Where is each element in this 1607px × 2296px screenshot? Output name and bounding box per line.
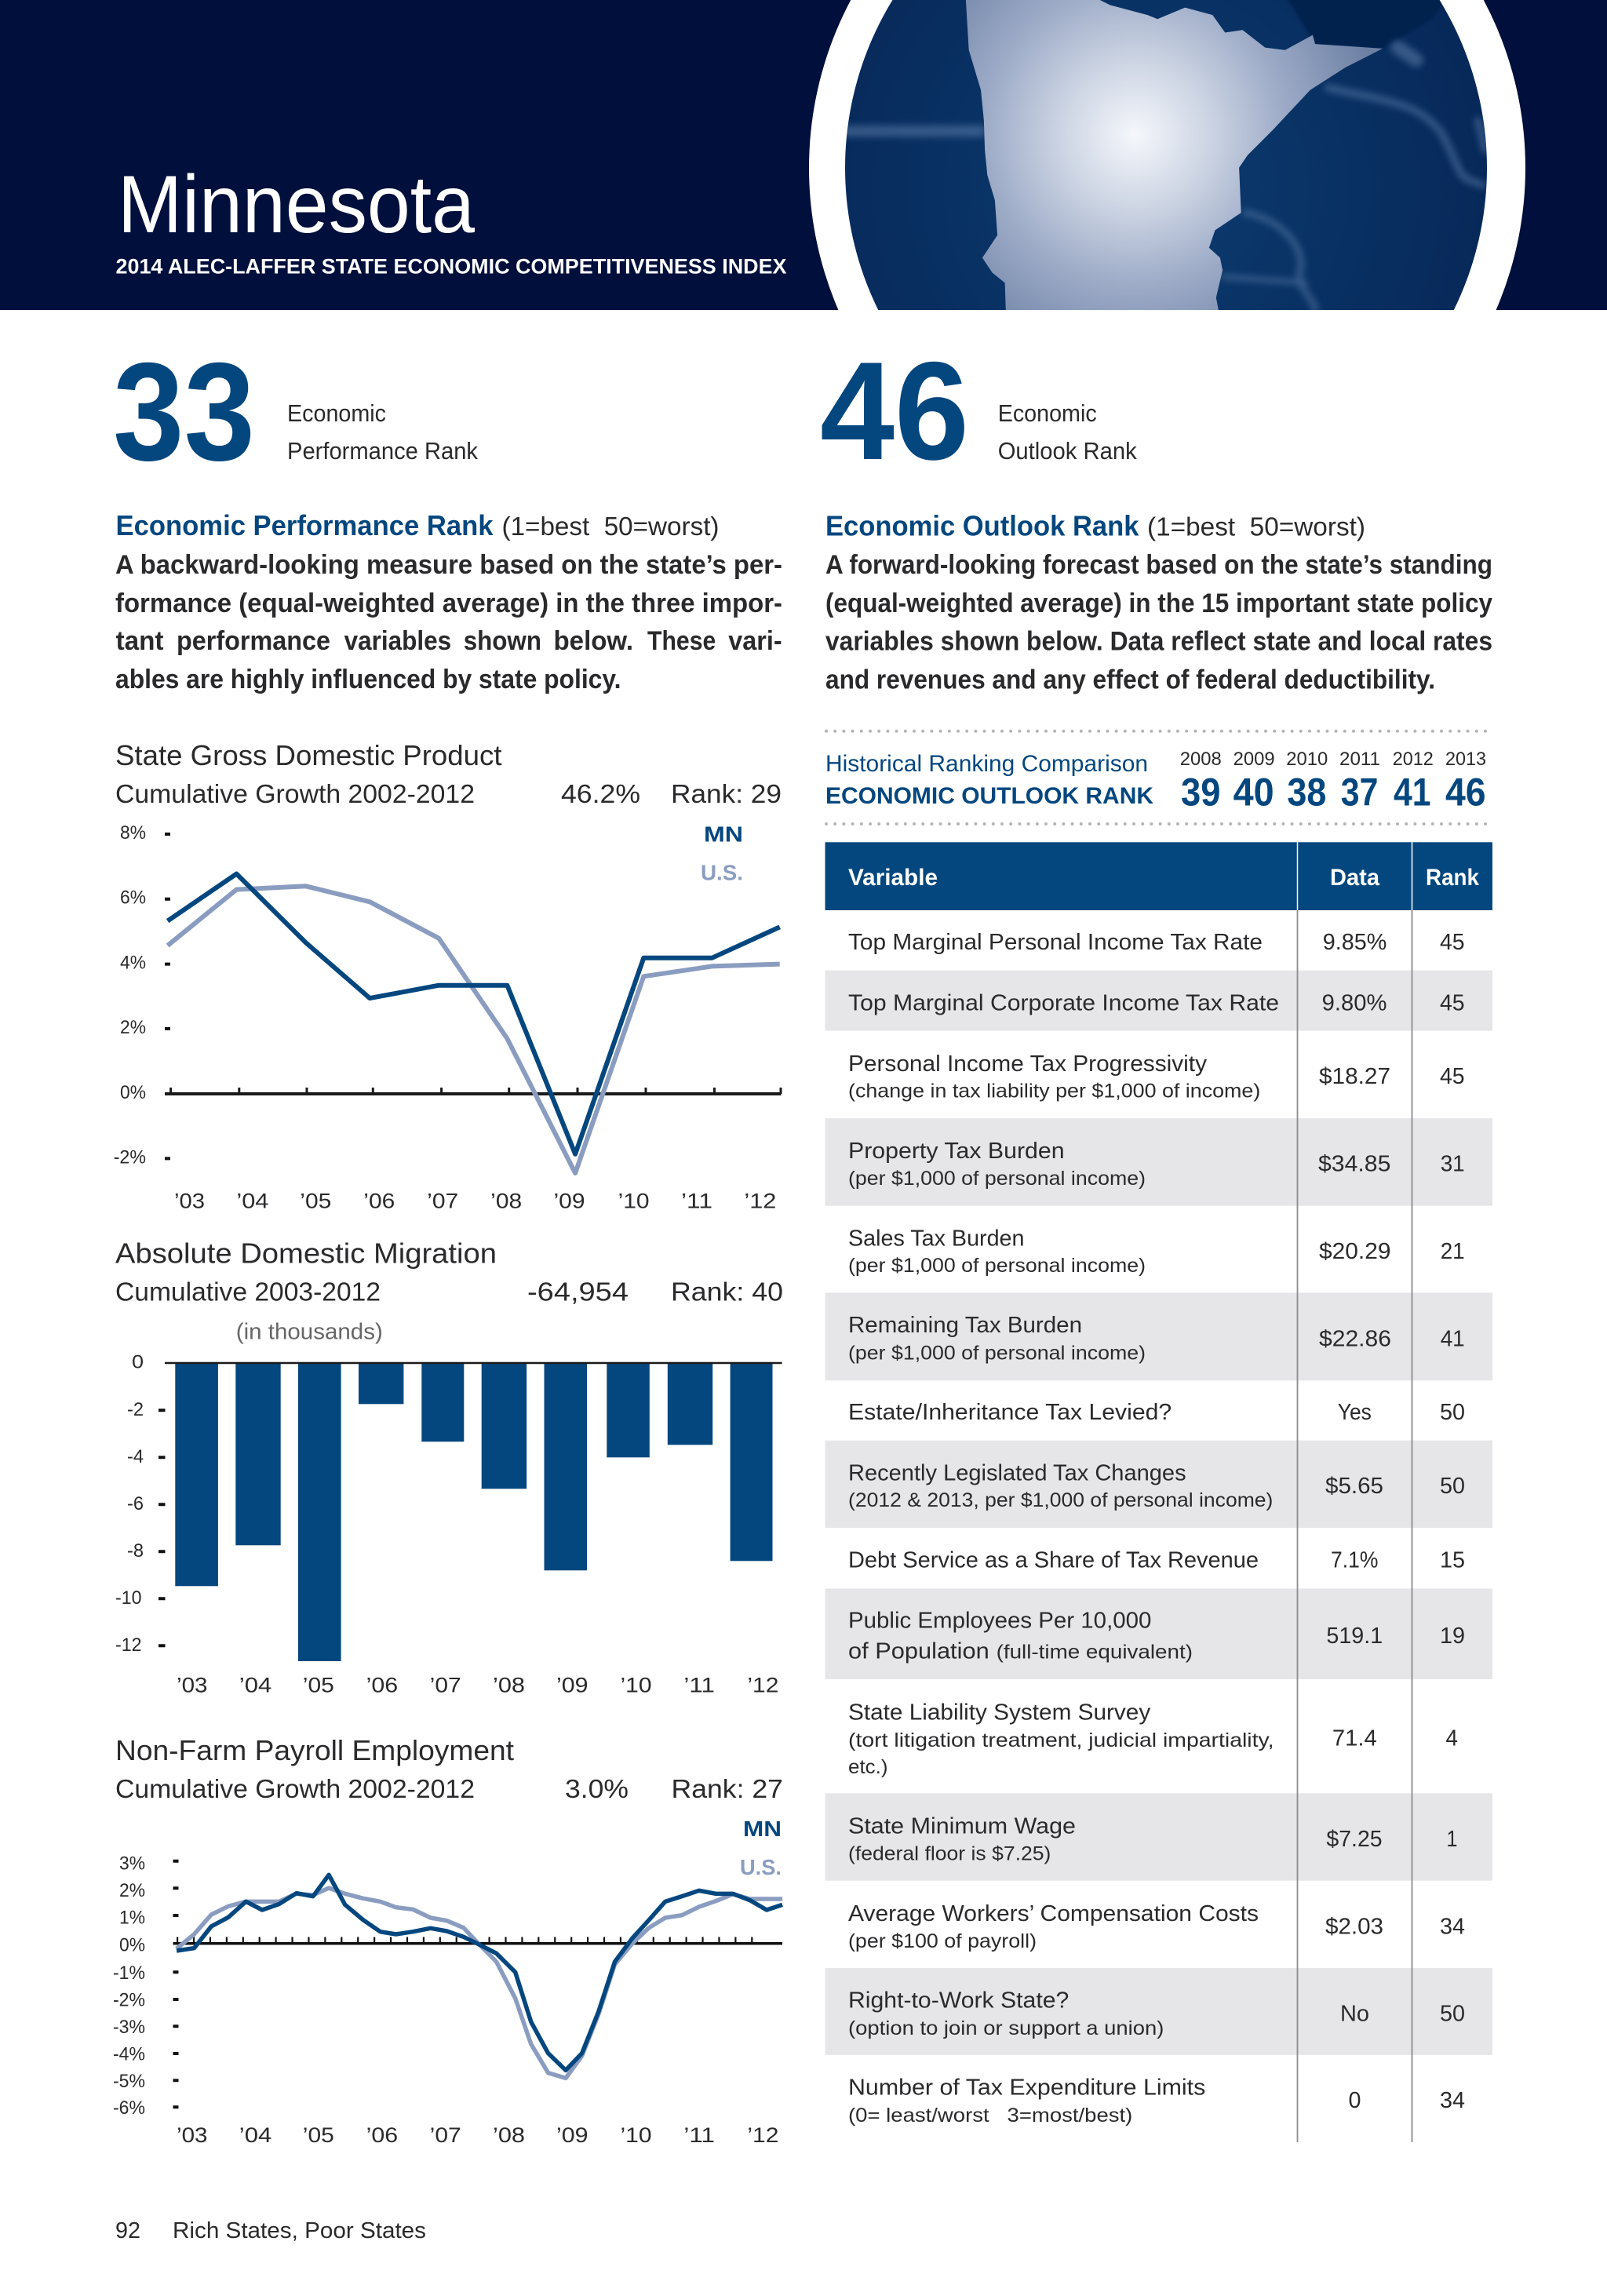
row: debt service xyxy=(848,1548,1465,1573)
comparison ranks: 39 xyxy=(1181,771,1221,815)
line chart: GDP growth: ’11 xyxy=(681,1190,712,1213)
description xyxy=(825,550,1492,695)
row: public employees: 519.1 xyxy=(1326,1624,1383,1649)
legend xyxy=(740,1817,782,1879)
line chart: payroll employment: -4% xyxy=(113,2043,145,2065)
row: right-to-work state: No xyxy=(1340,2001,1369,2026)
chart title: Non-Farm Payroll Employment xyxy=(115,1734,514,1766)
panel: absolute domestic migration xyxy=(115,1237,783,1696)
line chart: payroll employment: -5% xyxy=(113,2071,145,2092)
header band xyxy=(0,0,1607,310)
heading: (1=best 50=worst) xyxy=(1147,512,1365,541)
description: below. xyxy=(554,626,633,656)
state silhouette xyxy=(966,0,1383,313)
comparison ranks: 40 xyxy=(1233,771,1274,815)
panel: historical ranking comparison xyxy=(825,731,1493,824)
line chart: payroll employment: ’04 xyxy=(239,2123,271,2147)
row: remaining tax burden: $22.86 xyxy=(1319,1326,1391,1351)
comparison years: 2013 xyxy=(1445,749,1486,770)
footer: Rich States, Poor States xyxy=(173,2218,426,2243)
line chart: payroll employment: -2% xyxy=(113,1990,145,2010)
chart subtitle and stats: Rank: 27 xyxy=(672,1774,783,1803)
line chart: payroll employment: -3% xyxy=(113,2017,145,2038)
description: (equal-weighted average) in the 15 important state policy xyxy=(825,589,1492,618)
bar chart: migration: -4 xyxy=(127,1446,144,1467)
line chart: payroll employment: ’05 xyxy=(303,2123,334,2147)
legend: U.S. xyxy=(701,860,743,885)
description: performance xyxy=(177,626,330,656)
legend: MN xyxy=(704,822,743,846)
bar chart: migration: ’10 xyxy=(620,1673,651,1696)
legend xyxy=(701,822,743,885)
heading: Economic Performance Rank xyxy=(116,509,494,541)
panel: state gross domestic product xyxy=(114,739,782,1213)
row: workers compensation costs xyxy=(848,1901,1465,1952)
line chart: payroll employment: ’06 xyxy=(366,2123,398,2147)
rank caption: Economic xyxy=(998,399,1097,427)
row: sales tax burden: $20.29 xyxy=(1319,1239,1390,1264)
description: A forward-looking forecast based on the state’s standing xyxy=(825,550,1492,580)
row: tax expenditure limits xyxy=(848,2075,1465,2127)
row: debt service: 7.1% xyxy=(1331,1548,1378,1573)
line chart: GDP growth: ’10 xyxy=(618,1190,650,1213)
row: right-to-work state: (option to join or support a union) xyxy=(848,2017,1164,2039)
row: debt service: Debt Service as a Share of Tax Revenue xyxy=(848,1548,1259,1573)
line chart: GDP growth: -2% xyxy=(114,1147,146,1168)
chart subtitle and stats: Cumulative Growth 2002-2012 xyxy=(115,779,475,808)
bar chart: migration: ’03 xyxy=(177,1673,207,1696)
bar chart: migration: ’12 xyxy=(747,1673,778,1696)
row: public employees: 19 xyxy=(1440,1624,1465,1649)
bar chart: migration: -2 xyxy=(127,1399,144,1420)
line chart: payroll employment: ’07 xyxy=(430,2123,461,2147)
description: variables xyxy=(344,626,451,656)
row: remaining tax burden: (per $1,000 of personal income) xyxy=(848,1342,1146,1364)
line chart: payroll employment: 1% xyxy=(119,1907,145,1929)
rank caption xyxy=(998,399,1137,465)
row: property tax burden: Property Tax Burden xyxy=(848,1139,1065,1164)
bar chart: migration: -12 xyxy=(115,1635,141,1656)
chart subtitle and stats: 46.2% xyxy=(561,779,640,808)
row: property tax burden: (per $1,000 of personal income) xyxy=(848,1168,1146,1190)
chart subtitle and stats: 3.0% xyxy=(565,1774,629,1803)
row: property tax burden xyxy=(848,1139,1465,1190)
row: personal income tax progressivity xyxy=(848,1051,1465,1102)
row: estate/inheritance tax levied: Yes xyxy=(1338,1400,1372,1425)
row: sales tax burden: 21 xyxy=(1441,1239,1465,1264)
comparison ranks: 37 xyxy=(1341,771,1378,815)
line chart: payroll employment: -6% xyxy=(113,2097,145,2119)
line chart: payroll employment: 3% xyxy=(119,1853,145,1874)
line chart: payroll employment: -1% xyxy=(113,1963,145,1984)
title: Minnesota xyxy=(118,159,475,250)
table header: Data xyxy=(1330,865,1379,891)
row: recently legislated tax changes xyxy=(848,1460,1465,1511)
comparison labels: ECONOMIC OUTLOOK RANK xyxy=(825,783,1153,809)
row: remaining tax burden xyxy=(848,1313,1465,1364)
row: estate/inheritance tax levied: 50 xyxy=(1440,1400,1465,1425)
row: recently legislated tax changes: (2012 & 2013, per $1,000 of personal income) xyxy=(848,1489,1273,1511)
row: top marginal corporate income tax rate xyxy=(848,990,1465,1015)
comparison years: 2010 xyxy=(1286,749,1328,770)
row: sales tax burden: Sales Tax Burden xyxy=(848,1226,1025,1251)
row: state minimum wage: $7.25 xyxy=(1326,1827,1383,1852)
description: shown xyxy=(464,626,541,656)
row: estate/inheritance tax levied: Estate/Inheritance Tax Levied? xyxy=(848,1400,1172,1425)
description: variables shown below. Data reflect state and local rates xyxy=(825,626,1492,656)
comparison years: 2008 xyxy=(1180,749,1222,770)
line chart: GDP growth: ’09 xyxy=(554,1190,585,1213)
row: personal income tax progressivity: $18.27 xyxy=(1319,1064,1390,1089)
table header xyxy=(825,842,1492,910)
line chart: payroll employment: ’11 xyxy=(683,2123,715,2147)
chart subtitle and stats xyxy=(115,779,782,808)
chart subtitle and stats: Cumulative 2003-2012 xyxy=(115,1277,381,1306)
heading xyxy=(825,510,1365,541)
row: workers compensation costs: (per $100 of payroll) xyxy=(848,1930,1037,1952)
description: vari- xyxy=(728,626,782,656)
line chart: payroll employment xyxy=(113,1817,782,2147)
panel: economic outlook rank xyxy=(820,333,1492,695)
comparison years xyxy=(1180,749,1486,770)
table: policy variables xyxy=(825,842,1492,2142)
comparison years: 2011 xyxy=(1339,749,1380,770)
comparison ranks xyxy=(1181,771,1486,815)
heading xyxy=(116,509,719,541)
line chart: GDP growth: 2% xyxy=(120,1017,146,1038)
row: state liability system survey: 71.4 xyxy=(1332,1726,1377,1751)
row: state liability system survey: State Liability System Survey xyxy=(848,1700,1151,1725)
comparison labels: Historical Ranking Comparison xyxy=(825,751,1148,777)
row: remaining tax burden: Remaining Tax Burden xyxy=(848,1313,1082,1338)
footer: 92 xyxy=(115,2218,140,2243)
bar chart: migration: ’05 xyxy=(303,1673,334,1696)
line chart: payroll employment: ’10 xyxy=(620,2123,651,2147)
row: debt service: 15 xyxy=(1440,1548,1465,1573)
row: top marginal personal income tax rate: 45 xyxy=(1440,930,1465,955)
line chart: GDP growth: 0% xyxy=(120,1082,146,1103)
row: tax expenditure limits: (0= least/worst 3=most/best) xyxy=(848,2105,1132,2127)
row: right-to-work state: Right-to-Work State? xyxy=(848,1988,1069,2014)
line chart: GDP growth: 8% xyxy=(120,822,146,844)
row: top marginal corporate income tax rate: Top Marginal Corporate Income Tax Rate xyxy=(848,990,1279,1015)
bar chart: migration: -8 xyxy=(127,1540,144,1562)
chart subtitle and stats: -64,954 xyxy=(527,1277,629,1306)
bar chart: migration: ’08 xyxy=(493,1673,525,1696)
line chart: GDP growth xyxy=(114,822,781,1213)
line chart: payroll employment: ’08 xyxy=(493,2123,525,2147)
row: right-to-work state xyxy=(848,1988,1465,2039)
rank caption xyxy=(287,399,478,465)
U.S. series line xyxy=(177,1888,782,2078)
row: public employees: Public Employees Per 10,000 xyxy=(848,1609,1151,1634)
row: public employees xyxy=(848,1609,1465,1664)
description: ables are highly influenced by state policy. xyxy=(115,665,621,694)
row: tax expenditure limits: 34 xyxy=(1440,2088,1465,2113)
panel: non-farm payroll employment xyxy=(113,1734,783,2147)
line chart: GDP growth: ’07 xyxy=(427,1190,458,1213)
row: sales tax burden: (per $1,000 of personal income) xyxy=(848,1255,1146,1277)
row: estate/inheritance tax levied xyxy=(848,1400,1465,1425)
row: state minimum wage: State Minimum Wage xyxy=(848,1814,1076,1839)
row: state liability system survey xyxy=(848,1700,1458,1778)
row: state liability system survey: 4 xyxy=(1445,1726,1458,1751)
rank caption: Economic xyxy=(287,399,386,427)
description: A backward-looking measure based on the state’s per- xyxy=(115,550,782,580)
row: state liability system survey: etc.) xyxy=(848,1756,888,1778)
row: top marginal personal income tax rate: 9.85% xyxy=(1323,930,1387,955)
line chart: payroll employment: ’03 xyxy=(177,2123,207,2147)
U.S. series line xyxy=(168,886,780,1173)
comparison ranks: 46 xyxy=(1445,771,1486,815)
bar chart: migration: ’07 xyxy=(430,1673,461,1696)
MN series line xyxy=(168,874,780,1154)
row: recently legislated tax changes: $5.65 xyxy=(1325,1474,1383,1499)
row: workers compensation costs: $2.03 xyxy=(1325,1915,1383,1940)
heading: (1=best 50=worst) xyxy=(502,512,719,541)
row: top marginal personal income tax rate xyxy=(848,930,1465,955)
table header: Variable xyxy=(848,865,938,891)
bar chart: migration: ’11 xyxy=(683,1673,715,1696)
description: These xyxy=(647,626,716,656)
globe with Minnesota map xyxy=(809,0,1525,310)
line chart: GDP growth: ’05 xyxy=(300,1190,331,1213)
row: top marginal corporate income tax rate: 45 xyxy=(1440,990,1465,1015)
big number 33: 33 xyxy=(113,333,255,490)
row: right-to-work state: 50 xyxy=(1440,2001,1465,2026)
line chart: GDP growth: 4% xyxy=(120,953,146,973)
comparison years: 2012 xyxy=(1393,749,1434,770)
heading: Economic Outlook Rank xyxy=(825,510,1139,541)
line chart: GDP growth: ’08 xyxy=(490,1190,522,1213)
row: personal income tax progressivity: 45 xyxy=(1440,1064,1465,1089)
bar chart: migration: -6 xyxy=(127,1493,144,1514)
row: state minimum wage xyxy=(848,1814,1458,1864)
comparison years: 2009 xyxy=(1233,749,1275,770)
row: personal income tax progressivity: Personal Income Tax Progressivity xyxy=(848,1051,1208,1077)
description: and revenues and any effect of federal deductibility. xyxy=(825,665,1435,695)
row: tax expenditure limits: Number of Tax Expenditure Limits xyxy=(848,2075,1205,2100)
MN series line xyxy=(177,1875,782,2070)
big number 46: 46 xyxy=(820,333,969,489)
line chart: GDP growth: 6% xyxy=(120,887,146,909)
line chart: GDP growth: ’12 xyxy=(744,1190,776,1213)
row: state minimum wage: 1 xyxy=(1447,1827,1458,1852)
bar chart: migration: ’04 xyxy=(239,1673,271,1696)
panel: economic performance rank xyxy=(113,333,782,694)
bar chart: migration: -10 xyxy=(115,1587,141,1609)
table header: Rank xyxy=(1426,865,1479,891)
row: state minimum wage: (federal floor is $7.25) xyxy=(848,1842,1051,1864)
chart subtitle and stats: Rank: 40 xyxy=(671,1277,783,1306)
legend: MN xyxy=(743,1817,782,1841)
row: property tax burden: 31 xyxy=(1441,1152,1465,1177)
bar chart: migration: ’09 xyxy=(556,1673,589,1696)
line chart: GDP growth: ’06 xyxy=(363,1190,395,1213)
rank caption: Outlook Rank xyxy=(998,437,1137,465)
row: workers compensation costs: 34 xyxy=(1440,1915,1465,1940)
line chart: GDP growth: ’04 xyxy=(236,1190,268,1213)
row: workers compensation costs: Average Workers’ Compensation Costs xyxy=(848,1901,1259,1926)
row: top marginal corporate income tax rate: 9.80% xyxy=(1322,990,1387,1015)
rank caption: Performance Rank xyxy=(287,437,478,465)
chart subtitle and stats: Rank: 29 xyxy=(671,779,782,808)
chart subtitle and stats: Cumulative Growth 2002-2012 xyxy=(115,1774,475,1803)
row: remaining tax burden: 41 xyxy=(1441,1326,1465,1351)
row: top marginal personal income tax rate: Top Marginal Personal Income Tax Rate xyxy=(848,930,1263,955)
row: recently legislated tax changes: 50 xyxy=(1440,1474,1465,1499)
line chart: payroll employment: ’12 xyxy=(747,2123,778,2147)
row: personal income tax progressivity: (change in tax liability per $1,000 of income) xyxy=(848,1080,1260,1102)
row: tax expenditure limits: 0 xyxy=(1348,2088,1361,2113)
row: sales tax burden xyxy=(848,1226,1465,1277)
legend: U.S. xyxy=(740,1855,782,1879)
description xyxy=(115,550,782,694)
description: tant xyxy=(116,626,163,656)
row: state liability system survey: (tort litigation treatment, judicial impartiality, xyxy=(848,1729,1274,1751)
row: public employees: of Population xyxy=(848,1639,989,1664)
comparison labels xyxy=(825,751,1153,809)
line chart: GDP growth: ’03 xyxy=(174,1190,205,1213)
bar chart: migration xyxy=(115,1351,782,1696)
comparison ranks: 41 xyxy=(1394,771,1431,815)
row: public employees: (full-time equivalent) xyxy=(997,1642,1193,1664)
chart subtitle and stats xyxy=(115,1277,783,1306)
unit note: (in thousands) xyxy=(236,1320,383,1345)
row: property tax burden: $34.85 xyxy=(1318,1152,1390,1177)
comparison ranks: 38 xyxy=(1287,771,1326,815)
line chart: payroll employment: ’09 xyxy=(556,2123,589,2147)
bar chart: migration: 0 xyxy=(132,1351,144,1373)
row: recently legislated tax changes: Recently Legislated Tax Changes xyxy=(848,1460,1186,1485)
bar chart: migration: ’06 xyxy=(366,1673,398,1696)
chart subtitle and stats xyxy=(115,1774,783,1803)
chart title: Absolute Domestic Migration xyxy=(115,1237,497,1270)
subtitle: 2014 ALEC-LAFFER STATE ECONOMIC COMPETITIVENESS INDEX xyxy=(116,254,786,278)
description: formance (equal-weighted average) in the three impor- xyxy=(115,589,782,618)
line chart: payroll employment: 2% xyxy=(119,1880,145,1901)
line chart: payroll employment: 0% xyxy=(119,1935,145,1955)
chart title: State Gross Domestic Product xyxy=(115,739,502,771)
